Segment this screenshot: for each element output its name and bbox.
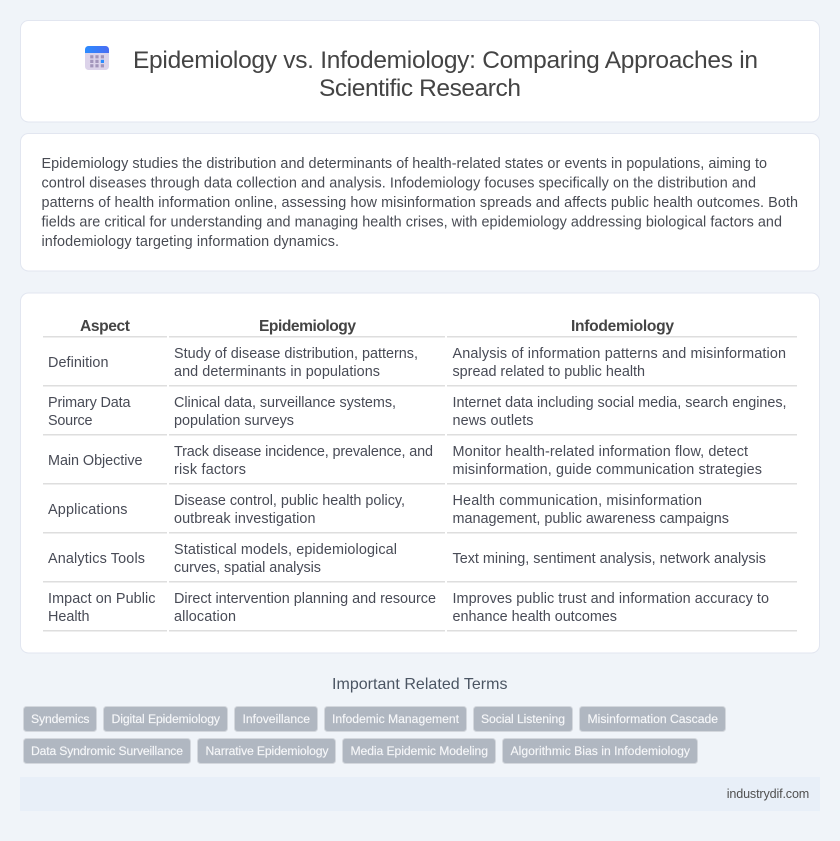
heading: important related terms: Important Related Terms [332, 676, 508, 693]
row: analytics tools: curves, spatial analysis [174, 560, 321, 576]
row: primary data source: Primary Data [48, 395, 130, 411]
row: impact on public health: enhance health outcomes [452, 609, 617, 625]
panel: introduction [20, 134, 820, 271]
row: main objective: Track disease incidence, prevalence, and [174, 444, 433, 460]
tag: algorithmic bias in infodemiology: Algorithmic Bias in Infodemiology [510, 744, 691, 758]
row: primary data source: Internet data including social media, search engines, [452, 395, 786, 411]
intro paragraph [42, 156, 798, 250]
panel: comparison table [20, 293, 820, 653]
title [133, 47, 758, 102]
row: impact on public health: allocation [174, 609, 236, 625]
row: definition: Study of disease distribution, patterns, [174, 346, 418, 362]
row: applications: management, public awareness campaigns [452, 511, 729, 527]
tag: misinformation cascade: Misinformation Cascade [588, 712, 718, 726]
tag: syndemics: Syndemics [31, 712, 90, 726]
tag: data syndromic surveillance [24, 738, 190, 764]
row: definition: spread related to public health [452, 364, 645, 380]
row: impact on public health: Improves public trust and information accuracy to [452, 591, 769, 607]
panel: header [20, 20, 820, 122]
row: primary data source: news outlets [452, 413, 534, 429]
row: analytics tools [43, 542, 797, 582]
row: primary data source: Source [48, 413, 92, 429]
intro paragraph: fields are critical for understanding and managing health crises, with epidemiology addressing biological factors and [42, 214, 782, 230]
intro paragraph: control diseases through data collection and analysis. Infodemiology focuses specifically on the distribution and [42, 176, 756, 192]
tag: data syndromic surveillance: Data Syndromic Surveillance [31, 744, 183, 758]
row: applications: Health communication, misinformation [452, 493, 702, 509]
intro paragraph: patterns of health information online, assessing how misinformation spreads and affects public health outcomes. Both [42, 195, 798, 211]
row: analytics tools: Statistical models, epidemiological [174, 542, 397, 558]
tag: infodemic management [324, 706, 466, 732]
tag: misinformation cascade [580, 706, 726, 732]
tag: infodemic management: Infodemic Management [332, 712, 460, 726]
row: definition: and determinants in populations [174, 364, 380, 380]
tag: digital epidemiology [104, 706, 228, 732]
row: impact on public health: Impact on Public [48, 591, 156, 607]
row: applications [43, 493, 797, 534]
row: impact on public health: Direct intervention planning and resource [174, 591, 436, 607]
row: analytics tools: Analytics Tools [48, 551, 145, 567]
icon: calendar [85, 46, 109, 70]
row: definition [43, 346, 797, 386]
row: main objective: risk factors [174, 462, 246, 478]
row: applications: Applications [48, 502, 128, 518]
tag: media epidemic modeling [342, 738, 496, 764]
row: applications: outbreak investigation [174, 511, 316, 527]
row: definition: Analysis of information patterns and misinformation [452, 346, 786, 362]
title: Epidemiology vs. Infodemiology: Comparing Approaches in [133, 47, 758, 74]
footer source: industrydif.com [727, 787, 809, 801]
tag: social listening: Social Listening [481, 712, 565, 726]
title: Scientific Research [319, 75, 521, 102]
intro paragraph: Epidemiology studies the distribution and determinants of health-related states or events in populations, aiming to [42, 156, 767, 172]
row: impact on public health [43, 591, 797, 632]
tag list [24, 706, 726, 764]
row: main objective: misinformation, guide communication strategies [452, 462, 762, 478]
table header: Aspect [80, 318, 130, 335]
row: analytics tools: Text mining, sentiment analysis, network analysis [452, 551, 766, 567]
row: primary data source [43, 395, 797, 436]
tag: infoveillance: Infoveillance [242, 712, 310, 726]
table header: Epidemiology [259, 318, 356, 335]
intro paragraph: infodemiology targeting information dynamics. [42, 234, 339, 250]
tag: narrative epidemiology: Narrative Epidemiology [206, 744, 329, 758]
tag: narrative epidemiology [198, 738, 336, 764]
tag: infoveillance [234, 706, 318, 732]
footer bar [20, 777, 820, 811]
tag: algorithmic bias in infodemiology [502, 738, 698, 764]
tag: media epidemic modeling: Media Epidemic Modeling [350, 744, 488, 758]
row: impact on public health: Health [48, 609, 90, 625]
table header [43, 318, 797, 338]
row: main objective: Main Objective [48, 453, 142, 469]
row: main objective [43, 444, 797, 484]
table header: Infodemiology [571, 318, 674, 335]
row: primary data source: Clinical data, surveillance systems, [174, 395, 396, 411]
row: definition: Definition [48, 355, 108, 371]
row: primary data source: population surveys [174, 413, 294, 429]
tag: digital epidemiology: Digital Epidemiology [112, 712, 221, 726]
tag: syndemics [24, 706, 96, 732]
row: main objective: Monitor health-related information flow, detect [452, 444, 748, 460]
row: applications: Disease control, public health policy, [174, 493, 405, 509]
tag: social listening [474, 706, 572, 732]
